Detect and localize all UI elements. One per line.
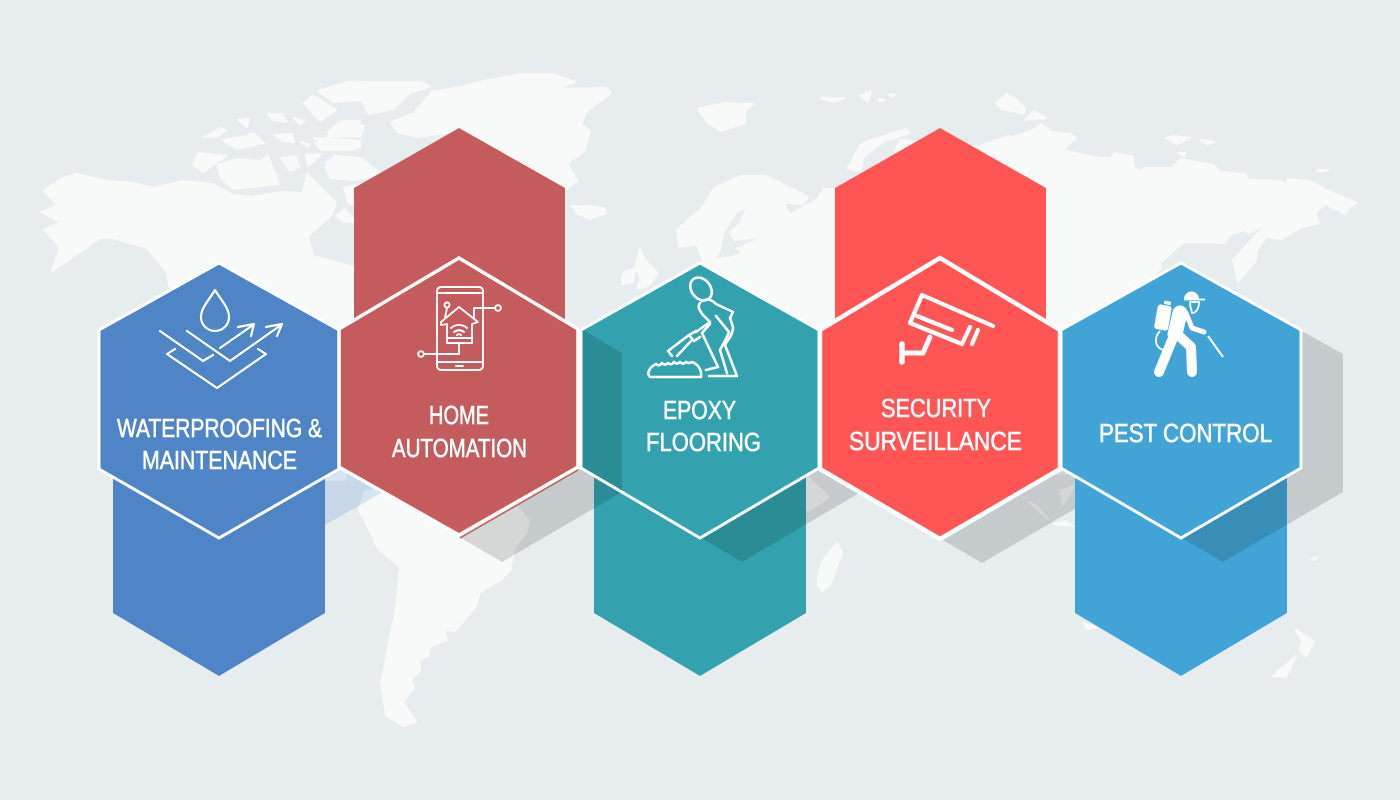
heading: security: SECURITY	[881, 393, 991, 423]
heading: automation: AUTOMATION	[392, 433, 527, 463]
panel: home automation	[339, 258, 578, 538]
Greenland	[391, 74, 611, 200]
panel: waterproofing and maintenance	[99, 263, 339, 538]
heading: surveillance: SURVEILLANCE	[849, 426, 1022, 456]
Siberian islands	[821, 91, 1328, 172]
South America	[359, 490, 529, 726]
back hexagon: epoxy flooring	[594, 470, 806, 676]
heading: flooring: FLOORING	[646, 427, 761, 457]
icon: worker spreading epoxy	[648, 273, 737, 377]
shadow: epoxy flooring	[623, 287, 861, 562]
Ellesmere and nearby islands	[315, 82, 430, 180]
shadow: security surveillance	[862, 282, 1102, 563]
panel: epoxy flooring	[581, 263, 819, 538]
Southeast Asia islands	[1029, 486, 1074, 526]
back hexagon: security surveillance	[835, 128, 1046, 330]
Novaya Zemlya	[848, 129, 910, 172]
North America	[41, 174, 370, 480]
heading: maintenance: MAINTENANCE	[142, 445, 297, 475]
icon: smart home phone	[418, 287, 501, 370]
back hexagon: pest control	[1075, 470, 1287, 676]
heading: pest control: PEST CONTROL	[1099, 418, 1272, 448]
heading: home: HOME	[429, 400, 489, 430]
Africa horn	[800, 470, 829, 511]
Eurasia	[650, 124, 1357, 480]
back hexagon: waterproofing	[113, 470, 325, 676]
Tasmania and New Zealand	[1084, 557, 1318, 677]
world map	[41, 74, 1357, 726]
Arctic islands	[193, 81, 360, 222]
shadow: pest control	[1103, 287, 1343, 562]
icon: pest control sprayer	[1154, 292, 1223, 372]
Madagascar	[818, 543, 842, 591]
shadow: waterproofing	[141, 287, 381, 562]
icon: security camera	[902, 295, 993, 362]
British Isles	[622, 249, 658, 289]
shadow: home automation	[382, 282, 622, 562]
panel: pest control	[1061, 263, 1301, 538]
icon: water drop and layers	[160, 290, 282, 388]
Baltic cut-out	[716, 209, 760, 258]
heading: epoxy: EPOXY	[663, 395, 736, 425]
heading: waterproofing: WATERPROOFING &	[117, 413, 322, 443]
Iceland	[572, 206, 606, 219]
Svalbard	[698, 103, 754, 131]
back hexagon: home automation	[354, 128, 565, 330]
panel: security surveillance	[820, 258, 1060, 539]
